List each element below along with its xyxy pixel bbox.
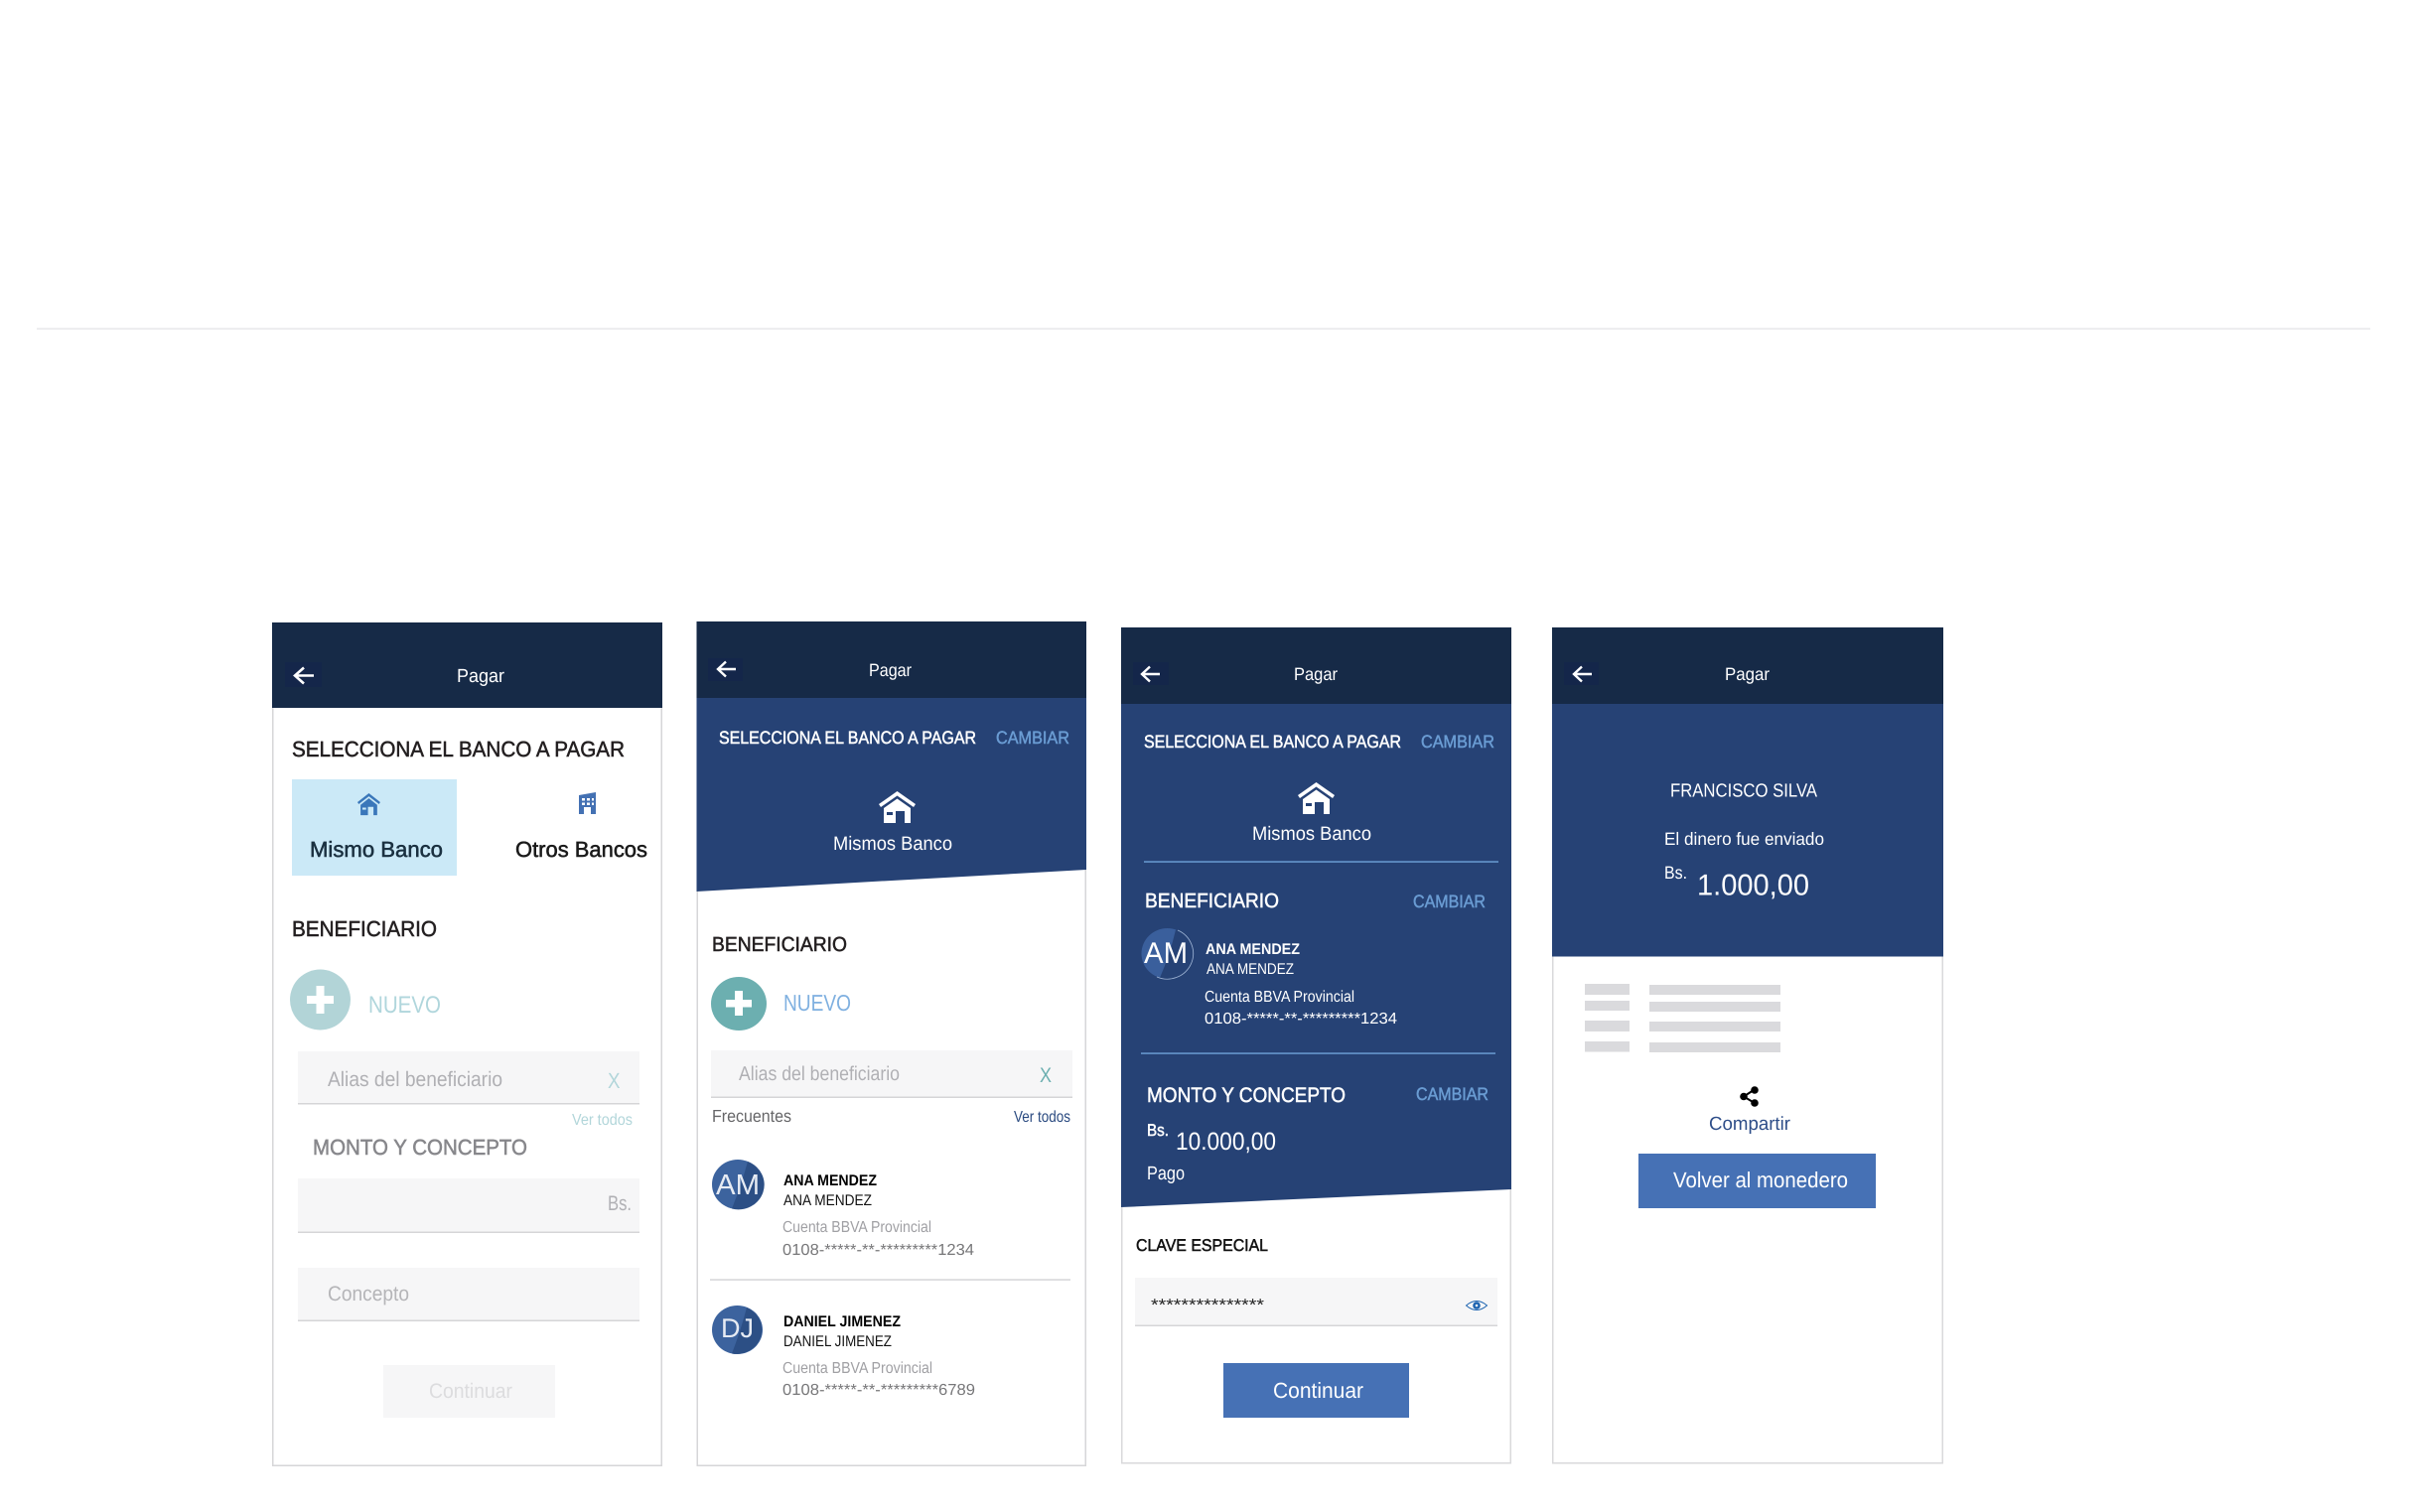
contact: Daniel Jimenez: DANIEL JIMENEZ — [783, 1333, 892, 1350]
share label: Compartir — [1709, 1114, 1791, 1135]
amount summary: Bs. — [1147, 1121, 1169, 1140]
amount summary: CAMBIAR — [1416, 1084, 1489, 1104]
concept input: Concepto — [328, 1283, 409, 1306]
selected bank — [1144, 732, 1494, 845]
new beneficiary button: NUEVO — [783, 990, 851, 1016]
back to wallet button — [1638, 1154, 1876, 1208]
confirmation panel: El dinero fue enviado — [1664, 829, 1824, 849]
alias input: Alias del beneficiario — [328, 1068, 502, 1091]
selected bank panel — [697, 698, 1086, 892]
beneficiary summary: CAMBIAR — [1413, 892, 1486, 911]
selected bank: SELECCIONA EL BANCO A PAGAR — [1144, 732, 1401, 752]
concept input — [298, 1268, 639, 1321]
heading: beneficiary: BENEFICIARIO — [712, 933, 847, 956]
top bar — [272, 622, 662, 708]
confirmation panel: Bs. — [1664, 863, 1687, 883]
option: same bank — [292, 779, 457, 876]
disabled continue button: Continuar — [429, 1380, 512, 1403]
icon: eye — [1466, 1301, 1488, 1310]
amount input — [298, 1178, 639, 1233]
top bar — [697, 621, 1086, 698]
heading: amount and concept: MONTO Y CONCEPTO — [313, 1135, 527, 1160]
phone screen 4: confirmation — [1552, 627, 1943, 1463]
amount summary — [1147, 1084, 1489, 1184]
beneficiary summary: ANA MENDEZ — [1206, 961, 1294, 978]
contact: Daniel Jimenez: DJ — [721, 1313, 754, 1343]
new beneficiary button: NUEVO — [368, 992, 441, 1019]
top bar: Pagar — [457, 666, 505, 687]
amount input: Bs. — [608, 1192, 632, 1215]
confirmation panel — [1552, 704, 1943, 957]
beneficiary summary: AM — [1144, 937, 1188, 970]
phone screen 1: select bank — [272, 622, 662, 1465]
contact: Ana Mendez — [712, 1160, 974, 1259]
selected bank panel: Mismos Banco — [833, 833, 952, 855]
selected bank panel: CAMBIAR — [996, 728, 1069, 748]
contact: Ana Mendez: ANA MENDEZ — [783, 1192, 872, 1209]
contact: Daniel Jimenez: Cuenta BBVA Provincial — [782, 1360, 932, 1377]
icon: share — [1740, 1086, 1759, 1107]
contact: Ana Mendez: ANA MENDEZ — [783, 1172, 877, 1189]
beneficiary summary: ANA MENDEZ — [1206, 941, 1300, 958]
icon: house — [879, 791, 916, 823]
new beneficiary button — [711, 977, 851, 1031]
top bar: Pagar — [869, 660, 912, 680]
contact: Ana Mendez: AM — [716, 1169, 760, 1201]
see all link: Ver todos — [572, 1112, 633, 1129]
phone screen 2: choose beneficiary — [697, 621, 1086, 1465]
top bar: Pagar — [1725, 664, 1770, 684]
alias input — [711, 1050, 1072, 1098]
beneficiary summary: 0108-*****-**-*********1234 — [1205, 1011, 1397, 1028]
confirmation panel: FRANCISCO SILVA — [1670, 780, 1817, 802]
confirmation panel: 1.000,00 — [1697, 870, 1809, 901]
alias input — [298, 1051, 639, 1104]
summary panel — [1121, 704, 1511, 1207]
contact: Daniel Jimenez: DANIEL JIMENEZ — [783, 1313, 901, 1330]
selected bank panel: SELECCIONA EL BANCO A PAGAR — [719, 728, 976, 748]
receipt placeholder lines — [1585, 984, 1780, 1052]
special key input: *************** — [1151, 1296, 1264, 1314]
amount summary: Pago — [1147, 1164, 1185, 1184]
phone screen 3: confirm and special key — [1121, 627, 1511, 1463]
beneficiary summary: Cuenta BBVA Provincial — [1205, 989, 1354, 1006]
option: other banks — [515, 792, 647, 862]
heading: select bank: SELECCIONA EL BANCO A PAGAR — [292, 737, 625, 761]
continue button — [1223, 1363, 1409, 1418]
contact: Daniel Jimenez: 0108-*****-**-*********6789 — [782, 1382, 975, 1399]
option: same bank: Mismo Banco — [310, 837, 443, 862]
selected bank: Mismos Banco — [1252, 823, 1371, 845]
option: other banks: Otros Bancos — [515, 837, 647, 862]
amount summary: 10.000,00 — [1176, 1128, 1276, 1156]
top bar — [1552, 627, 1943, 704]
contact: Ana Mendez: Cuenta BBVA Provincial — [782, 1219, 931, 1236]
special key input — [1135, 1278, 1497, 1326]
new beneficiary button — [290, 969, 441, 1031]
special key label: CLAVE ESPECIAL — [1136, 1236, 1268, 1255]
see all link: Ver todos — [1014, 1109, 1070, 1126]
alias input: Alias del beneficiario — [739, 1063, 900, 1085]
beneficiary summary — [1142, 890, 1486, 1028]
contact: Daniel Jimenez — [712, 1306, 975, 1399]
heading: beneficiary: BENEFICIARIO — [292, 916, 437, 941]
top bar — [1121, 627, 1511, 704]
top bar: Pagar — [1294, 664, 1338, 684]
disabled continue button — [383, 1365, 555, 1418]
beneficiary summary: BENEFICIARIO — [1145, 890, 1279, 912]
back to wallet button: Volver al monedero — [1673, 1168, 1848, 1192]
alias input: X — [1040, 1064, 1052, 1087]
alias input: X — [608, 1068, 621, 1093]
continue button: Continuar — [1273, 1378, 1363, 1403]
selected bank: CAMBIAR — [1421, 732, 1494, 752]
amount summary: MONTO Y CONCEPTO — [1147, 1084, 1346, 1107]
frequent contacts label: Frecuentes — [712, 1106, 791, 1126]
contact: Ana Mendez: 0108-*****-**-*********1234 — [782, 1242, 974, 1259]
